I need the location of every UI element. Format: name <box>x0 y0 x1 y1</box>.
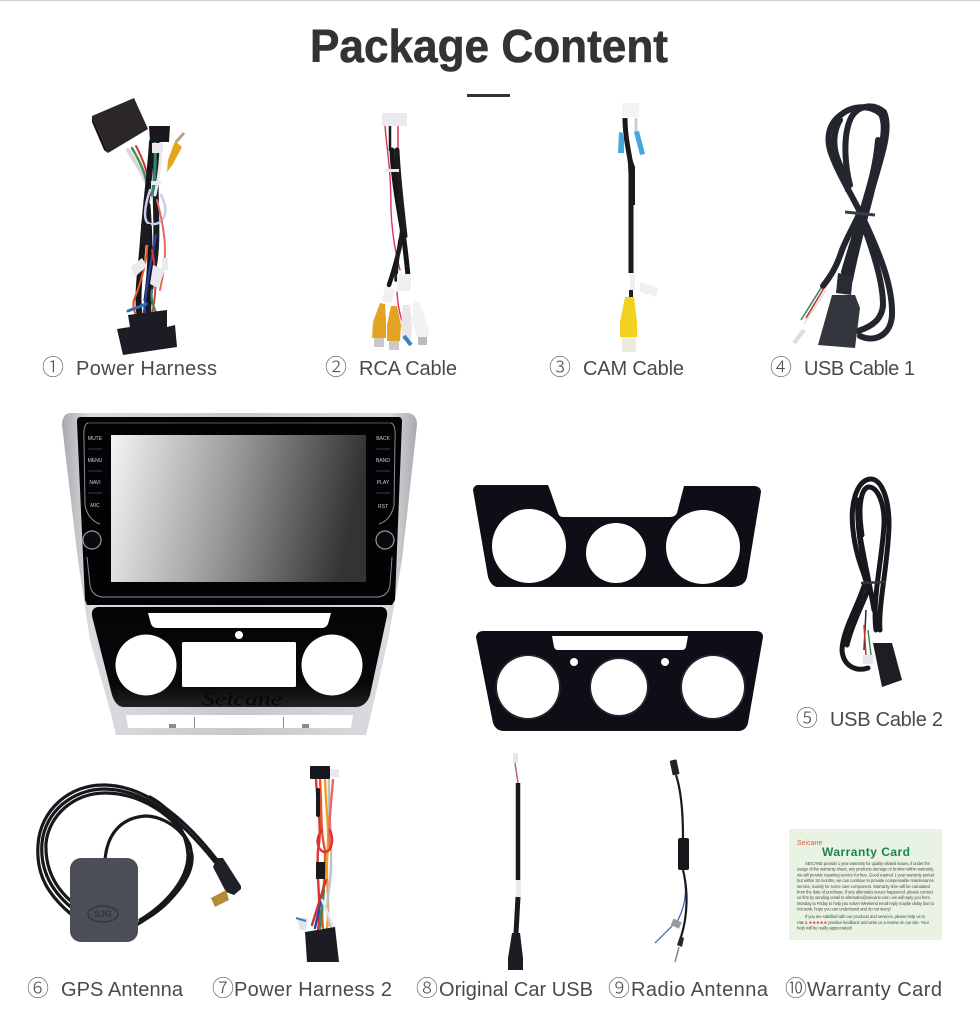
label 10 <box>785 971 942 1003</box>
side buttons: MUTE <box>88 436 103 442</box>
warranty text: not work, hope you can understand and do not worry! <box>797 907 891 912</box>
warranty card <box>789 829 942 940</box>
warranty text: rate a ★★★★★ positive feedback and write us a review on our site. Your <box>797 920 930 925</box>
item 9: radio antenna <box>655 759 689 962</box>
warranty text <box>797 861 935 931</box>
control box <box>92 98 148 153</box>
item 6: GPS antenna <box>38 785 241 942</box>
warranty card: Seicane <box>797 840 822 847</box>
label 8: Original Car USB <box>439 979 593 1001</box>
label 2 <box>325 350 457 382</box>
label 2: RCA Cable <box>359 358 457 380</box>
label 4 <box>770 350 915 382</box>
warranty text: from the date of purchase. If any aftersales issues happened, please contact <box>797 890 934 894</box>
angled SMA connector <box>213 858 241 895</box>
warranty text: If you are satisfied with our products and services, please help us to <box>805 914 926 919</box>
side buttons: MIC <box>90 503 100 509</box>
side buttons: MENU <box>88 458 103 464</box>
yellow RCA plug <box>167 141 182 172</box>
head unit <box>62 413 417 735</box>
warranty text: SEICANE provide 1 year warranty for quality related issues, if under the <box>805 861 931 866</box>
label 10: Warranty Card <box>807 979 942 1001</box>
label 2: ② <box>325 350 347 382</box>
RCA plugs <box>372 301 429 350</box>
bottom connector <box>305 927 339 962</box>
item 1: power harness <box>92 98 184 355</box>
label 8: ⑧ <box>416 971 438 1003</box>
lower vent <box>126 715 353 728</box>
label 5: ⑤ <box>796 701 818 733</box>
Seicane logo: Seicane <box>202 689 282 709</box>
side buttons: BACK <box>376 436 390 442</box>
item 4: USB cable 1 <box>794 106 892 348</box>
climate panel B <box>476 631 763 731</box>
side buttons: NAVI <box>89 480 101 486</box>
top connector <box>149 126 170 142</box>
label 1: ① <box>42 350 64 382</box>
label 8 <box>416 971 593 1003</box>
white labels <box>131 181 168 288</box>
side buttons: BAND <box>376 458 390 464</box>
silver frame <box>62 413 417 735</box>
item 7: power harness 2 <box>296 766 339 962</box>
label 1 <box>42 350 217 382</box>
label 7 <box>212 971 392 1003</box>
side buttons: PLAY <box>377 480 390 486</box>
label 3: CAM Cable <box>583 358 684 380</box>
USB socket <box>836 273 853 295</box>
USB socket <box>873 643 902 687</box>
inline connector <box>141 224 151 245</box>
label 7: ⑦ <box>212 971 234 1003</box>
label 4: USB Cable 1 <box>804 358 915 380</box>
warranty text: usage of the warranty sheet, any products damage or broken within warranty, <box>797 867 934 872</box>
lower panel <box>92 607 387 707</box>
item 5: USB cable 2 <box>842 479 902 687</box>
label 3: ③ <box>549 350 571 382</box>
screen bezel <box>77 417 402 605</box>
label 9: Radio Antenna <box>631 979 769 1001</box>
warranty text: help will be really appreciated! <box>797 926 852 931</box>
bottom connector <box>117 310 177 355</box>
label 10: ⑩ <box>785 971 807 1003</box>
labels on wires <box>382 274 411 304</box>
warranty text: Monday to Friday to help you solve! Weekend email reply maybe delay due to <box>797 901 935 906</box>
label 6 <box>27 971 184 1003</box>
label 9 <box>608 971 769 1003</box>
label 5: USB Cable 2 <box>830 709 943 731</box>
knobs <box>83 531 394 549</box>
label 1: Power Harness <box>76 358 217 380</box>
label 9: ⑨ <box>608 971 630 1003</box>
item 6: GPS antenna: SJG <box>94 909 112 919</box>
label 3 <box>549 350 684 382</box>
display <box>111 435 366 582</box>
warranty card: Warranty Card <box>822 845 910 859</box>
label 6: GPS Antenna <box>61 979 184 1001</box>
warranty text: service, mainly for some care component. Warranty time will be calculated <box>797 884 931 889</box>
warranty text: us first by sending email to aftersales@seicane.com, we will reply you from <box>797 895 930 900</box>
climate panel A <box>473 485 761 587</box>
warranty text: we will provide repairing service for free. Good expired 1 year warranty period <box>797 872 935 877</box>
side buttons: RST <box>378 504 388 510</box>
title: Package Content <box>310 20 668 72</box>
warranty text: but within 18 months, we can continue to provide compensable maintenance <box>797 878 935 883</box>
label 5 <box>796 701 943 733</box>
item 3: CAM cable <box>618 103 658 352</box>
antenna body <box>70 858 138 942</box>
label 7: Power Harness 2 <box>234 979 392 1001</box>
side buttons <box>88 436 390 510</box>
item 8: original car USB <box>508 753 523 970</box>
label 4: ④ <box>770 350 792 382</box>
item 2: RCA cable <box>372 113 429 350</box>
label 6: ⑥ <box>27 971 49 1003</box>
